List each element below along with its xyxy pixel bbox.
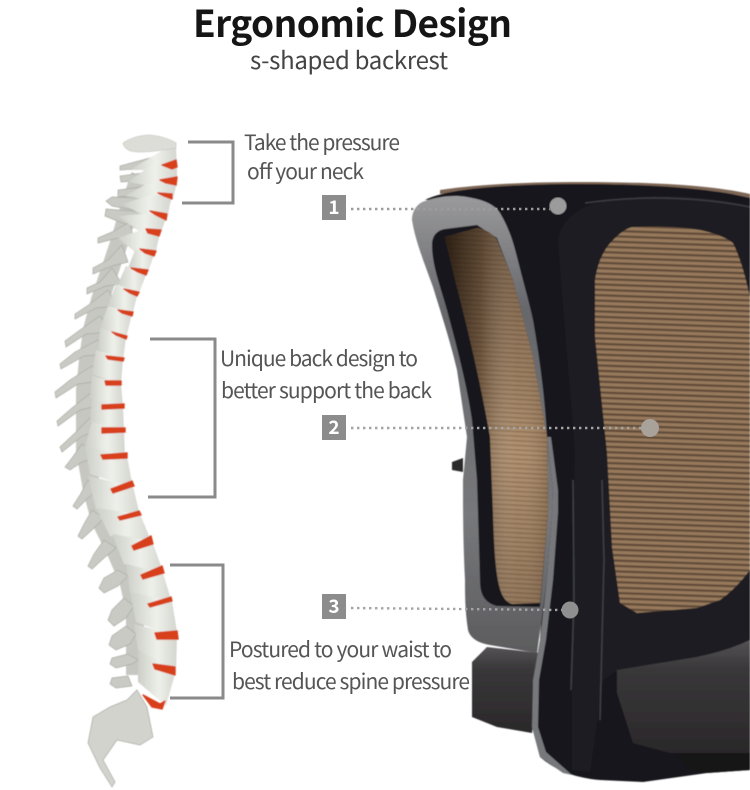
black frame: [425, 184, 750, 782]
frame highlight lines: [571, 480, 604, 720]
callout 2 text: [220, 343, 432, 405]
callout 3 number: [322, 592, 346, 619]
callout 3 text: Postured to your waist to: [229, 634, 452, 664]
intervertebral discs: [101, 160, 178, 709]
callout 3 text: [229, 634, 470, 696]
bracket: waist: [170, 565, 223, 698]
callout 3 number: 3: [328, 592, 340, 619]
left seat cushion: [472, 647, 540, 733]
left grey frame: [412, 196, 553, 653]
callout 2 marker: [641, 419, 659, 437]
atlas vertebra: [123, 135, 176, 152]
articular column: [85, 175, 140, 675]
tan top edge: [440, 182, 750, 200]
callout 3: [229, 592, 578, 696]
callout 3 text: best reduce spine pressure: [232, 666, 470, 696]
sacrum: [88, 690, 153, 787]
callout 1 text: off your neck: [247, 156, 364, 186]
callout 2 number: 2: [328, 413, 340, 440]
grey side strip: [532, 437, 572, 775]
callout 2 number: [322, 413, 346, 440]
callout 2 text: better support the back: [221, 375, 432, 405]
callout 1 text: Take the pressure: [244, 127, 400, 157]
chair knob: [452, 458, 463, 472]
bracket: back: [148, 339, 215, 497]
callout 3 marker: [562, 602, 578, 618]
callout 1 marker: [550, 198, 566, 214]
left mesh panel: [445, 228, 548, 604]
callout 2: [220, 343, 659, 440]
callout 1 number: [322, 193, 346, 220]
vertebra bodies: [85, 148, 178, 706]
frame top highlight: [585, 198, 750, 207]
right seat cushion: [617, 640, 750, 753]
callout 2 text: Unique back design to: [220, 343, 418, 373]
spinous processes: [55, 158, 150, 688]
mechanism under seat: [675, 753, 750, 773]
callout 1: [244, 127, 566, 220]
callout 1 text: [244, 127, 400, 186]
spine illustration: [55, 135, 178, 787]
office chair: [412, 182, 750, 782]
callout 1 leader: [351, 208, 550, 210]
callout 3 leader: [351, 608, 562, 610]
subtitle: s-shaped backrest: [250, 41, 448, 76]
right frame: [558, 196, 750, 772]
left frame inner shadow: [432, 225, 548, 607]
right mesh panel: [595, 227, 750, 613]
bracket: neck: [182, 142, 233, 203]
callout 1 number: 1: [328, 193, 340, 220]
callout 2 leader: [351, 427, 642, 429]
